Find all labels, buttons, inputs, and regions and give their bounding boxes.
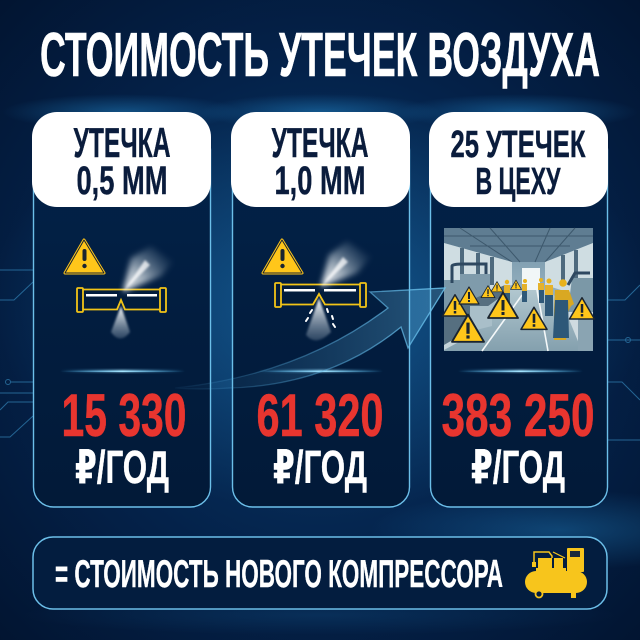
header: leak 1.0 mm (231, 112, 410, 207)
unit: rubles per year: ₽/ГОД (273, 441, 367, 493)
header: leak 0.5 mm: 0,5 ММ (76, 159, 168, 203)
icon: leaking pipe (77, 246, 173, 338)
warning signs (442, 280, 594, 342)
header: leak 0.5 mm (32, 112, 211, 207)
circuit decoration left (0, 270, 33, 437)
workers (504, 278, 574, 340)
glow line (258, 369, 383, 373)
panel: 25 leaks in workshop (429, 112, 608, 507)
cost: 61 320: 61 320 (256, 382, 384, 449)
icon: compressor (525, 548, 587, 598)
header: leak 1.0 mm: 1,0 ММ (274, 159, 366, 203)
icon: leaking pipe (275, 241, 371, 340)
arrow: rising cost (175, 288, 445, 389)
panel: leak 1.0 mm (231, 112, 410, 507)
icon: warning triangle (263, 240, 302, 273)
header: 25 leaks in workshop: В ЦЕХУ (476, 161, 561, 203)
circuit decoration right (608, 285, 640, 440)
icon: warning triangle (65, 240, 104, 273)
panel: leak 0.5 mm (32, 112, 211, 507)
header: 25 leaks in workshop (429, 112, 608, 207)
glow line (458, 369, 583, 373)
cost: 15 330: 15 330 (62, 382, 186, 449)
factory illustration (442, 228, 594, 351)
panel: conclusion (33, 537, 607, 609)
unit: rubles per year: ₽/ГОД (75, 441, 169, 493)
header: leak 0.5 mm: УТЕЧКА (74, 119, 170, 166)
header: leak 1.0 mm: УТЕЧКА (272, 119, 368, 166)
glow line (60, 369, 185, 373)
unit: rubles per year: ₽/ГОД (471, 441, 565, 493)
